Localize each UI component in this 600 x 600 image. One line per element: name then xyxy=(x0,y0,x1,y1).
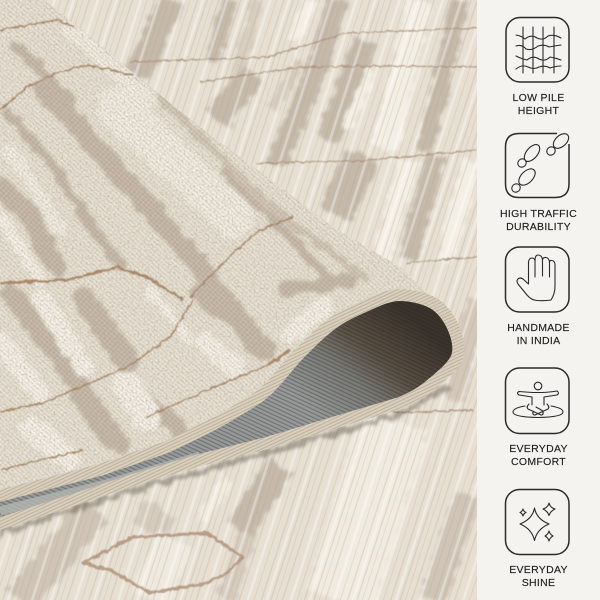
folded rug top surface xyxy=(0,0,429,490)
feature: everyday comfort xyxy=(504,367,570,468)
rug floor background xyxy=(0,0,477,600)
feature: low pile height xyxy=(505,16,570,117)
feature: high traffic durability xyxy=(500,132,577,233)
icon: sparkles xyxy=(504,488,570,556)
label: high traffic durability: DURABILITY xyxy=(506,221,571,233)
label: everyday comfort: COMFORT xyxy=(511,456,566,468)
label: high traffic durability: HIGH TRAFFIC xyxy=(500,208,577,220)
rug bound edges xyxy=(0,295,458,525)
icon: meditating figure xyxy=(504,367,570,434)
fold pattern lines xyxy=(0,20,293,470)
icon: footprints xyxy=(504,132,570,198)
label: low pile height xyxy=(512,92,564,117)
floor pattern lines xyxy=(83,28,477,593)
label: low pile height: LOW PILE xyxy=(512,92,564,104)
lower floor stripes xyxy=(20,300,477,600)
feature: everyday shine xyxy=(504,488,570,589)
sidebar panel of features xyxy=(477,0,600,600)
rug underside with backing xyxy=(0,295,458,525)
icon: raised hand xyxy=(504,246,570,313)
shadow beneath fold xyxy=(0,385,450,533)
feature: handmade in India xyxy=(504,246,570,347)
label: everyday shine xyxy=(509,564,568,589)
icon: woven pile xyxy=(505,16,570,83)
label: everyday comfort xyxy=(509,443,568,468)
label: high traffic durability xyxy=(500,208,577,233)
label: everyday comfort: EVERYDAY xyxy=(509,443,568,455)
label: low pile height: HEIGHT xyxy=(518,105,559,117)
label: handmade in India xyxy=(507,322,570,347)
label: handmade in India: HANDMADE xyxy=(507,322,570,334)
rolled rug photograph xyxy=(0,0,477,600)
label: everyday shine: SHINE xyxy=(522,577,555,589)
label: handmade in India: IN INDIA xyxy=(517,335,560,347)
label: everyday shine: EVERYDAY xyxy=(509,564,568,576)
